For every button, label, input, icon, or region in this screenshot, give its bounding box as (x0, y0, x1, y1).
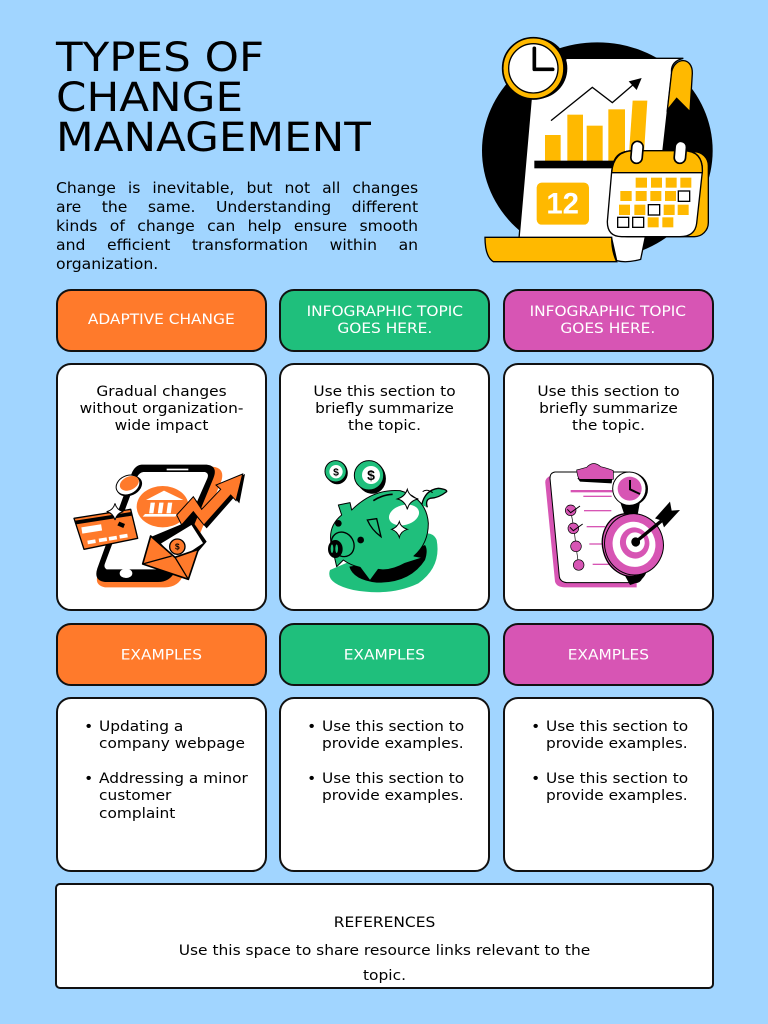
panel: examples list one: Addressing a minor (98, 771, 247, 787)
header: adaptive change: ADAPTIVE CHANGE (88, 312, 234, 328)
header: examples three (502, 622, 714, 686)
panel: topic two summary: the topic. (348, 418, 421, 434)
header: topic three (502, 289, 714, 352)
panel: topic two summary (279, 363, 490, 611)
panel: examples list three (502, 697, 714, 872)
panel: adaptive change summary: wide impact (114, 418, 208, 434)
panel: examples list one (56, 697, 266, 872)
header: examples one: EXAMPLES (120, 647, 202, 663)
title: MANAGEMENT (56, 115, 371, 161)
panel: examples list one: customer (98, 788, 171, 804)
panel: examples list one: company webpage (98, 736, 244, 752)
panel: topic three summary (502, 363, 714, 611)
panel: adaptive change summary (56, 363, 266, 611)
panel: examples list three: Use this section to (546, 771, 688, 787)
title: CHANGE (56, 75, 243, 121)
header: topic two: INFOGRAPHIC TOPIC (306, 304, 463, 320)
panel: references: REFERENCES (334, 915, 435, 931)
icon: green piggy bank with coins: $ (333, 467, 339, 478)
header: topic three: GOES HERE. (561, 320, 655, 336)
panel: references: topic. (363, 968, 406, 984)
icon: phone with bank, card, coin, envelope and arrow: $ (175, 542, 180, 552)
panel: topic two summary: briefly summarize (315, 401, 454, 417)
title: TYPES OF (56, 35, 264, 81)
panel: examples list two: provide examples. (322, 788, 464, 804)
header: adaptive change (56, 289, 266, 352)
panel: examples list two: Use this section to (322, 771, 464, 787)
header: examples two: EXAMPLES (344, 647, 425, 663)
icon: clipboard with clock and target (545, 463, 680, 588)
panel: examples list three: provide examples. (546, 736, 687, 752)
header: topic two: GOES HERE. (337, 320, 432, 336)
panel: examples list three: Use this section to (546, 718, 688, 734)
panel: examples list two (279, 697, 490, 872)
panel: topic two summary: Use this section to (313, 384, 456, 400)
intro paragraph (56, 180, 418, 273)
panel: examples list one: Updating a (98, 718, 183, 734)
panel: adaptive change summary: without organization- (79, 401, 243, 417)
intro paragraph: kinds of change can help ensure smooth (56, 218, 418, 235)
icon: report with chart, clock and calendar: 12 (546, 187, 579, 220)
header: topic two (279, 289, 490, 352)
panel: examples list two: provide examples. (322, 736, 464, 752)
header: topic three: INFOGRAPHIC TOPIC (530, 304, 686, 320)
panel: examples list three: provide examples. (546, 788, 687, 804)
intro paragraph: and efficient transformation within an (56, 237, 418, 254)
panel: examples list one: complaint (98, 806, 175, 822)
panel: references (55, 883, 714, 989)
panel: examples list two: Use this section to (322, 718, 464, 734)
panel: topic three summary: Use this section to (537, 384, 679, 400)
icon: green piggy bank with coins: $ (367, 467, 375, 483)
intro paragraph: are the same. Understanding different (56, 199, 418, 216)
icon: report with chart, clock and calendar (482, 36, 713, 262)
icon: phone with bank, card, coin, envelope and arrow (73, 464, 245, 588)
intro paragraph: organization. (56, 256, 158, 273)
header: examples one (56, 622, 266, 686)
panel: topic three summary: the topic. (572, 418, 644, 434)
panel: adaptive change summary: Gradual changes (96, 384, 226, 400)
header: examples two (279, 622, 490, 686)
panel: references: Use this space to share resource links relevant to the (179, 943, 590, 959)
intro paragraph: Change is inevitable, but not all changes (56, 180, 418, 197)
header: examples three: EXAMPLES (567, 647, 649, 663)
icon: green piggy bank with coins (324, 460, 448, 592)
panel: topic three summary: briefly summarize (539, 401, 677, 417)
title (56, 35, 371, 161)
